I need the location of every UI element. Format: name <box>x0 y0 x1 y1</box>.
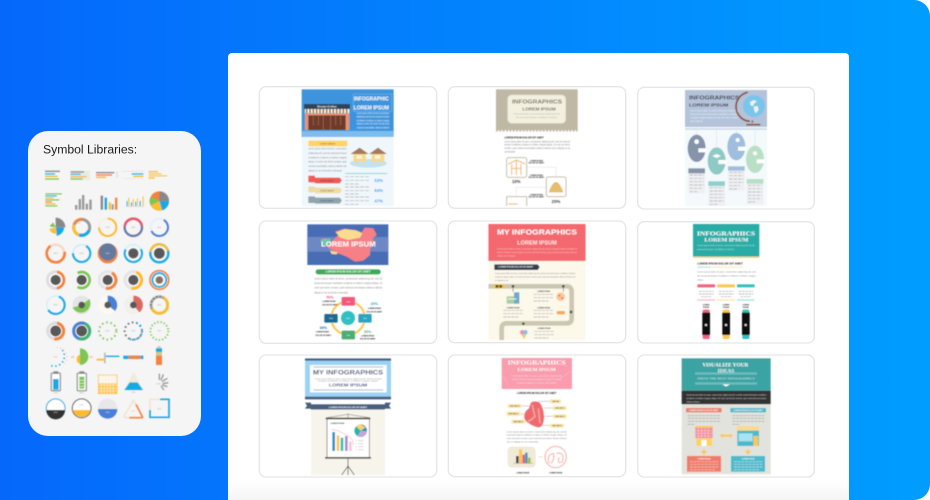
ribbon heading: LOREM IPSUM DOLOR SIT AMET <box>329 406 368 409</box>
template card 5: my infographics road <box>448 221 626 343</box>
road <box>488 284 572 342</box>
header: aliqua ut enim ad minim veniam quis <box>357 123 390 126</box>
header: LOREM IPSUM <box>517 240 557 246</box>
row 9: batteries, grid, pyramid, spinner: 70% <box>54 393 58 395</box>
row 10: fill gauges <box>46 399 169 419</box>
body text: enim ad minim veniam, quis nostrud exercitation ullamco laboris <box>314 287 383 290</box>
header <box>502 358 572 389</box>
cycle diagram: LOREM IPSUM <box>316 332 329 334</box>
body text: aliquip ex ea commodo consequat <box>314 291 348 294</box>
body text: LOREM IPSUM DOLOR SIT AMET <box>504 137 544 140</box>
heart diagram <box>506 399 567 428</box>
header with map: LOREM IPSUM <box>321 242 376 249</box>
right column <box>730 408 766 472</box>
cycle diagram: Text <box>347 334 351 337</box>
row 6: radial gauges <box>44 293 171 317</box>
body text: eiusmod tempor incididunt ut labore et dolore magna aliqua. Ut <box>507 434 567 437</box>
header: LOREM IPSUM <box>704 239 749 244</box>
green heading pill: LOREM IPSUM DOLOR SIT AMET <box>325 271 371 274</box>
ribbons: Lorem ipsum <box>320 189 334 192</box>
body text: tempor incididunt ut labore et dolore magna aliqua. Ut enim ad minim <box>504 144 570 147</box>
header: MY INFOGRAPHICS <box>313 369 384 376</box>
cycle diagram: DOLOR SIT AMET <box>360 338 376 341</box>
section heading: Lorem ipsum dolor sit amet, consectetur adipiscing elit, sed <box>697 271 756 274</box>
percentages <box>345 177 383 204</box>
text boxes <box>688 166 763 206</box>
template card 3: infographics globe <box>638 87 814 209</box>
header: eiusmod tempor incididunt ut labore <box>697 248 735 251</box>
cycle diagram: LOREM IPSUM <box>368 308 381 310</box>
row 6: radial gauges: 60% <box>157 305 162 307</box>
row 5: donuts <box>46 269 169 291</box>
flow diagram: DOLOR SIT AMET <box>529 176 545 179</box>
row 1: bar charts <box>45 171 167 180</box>
body text: enim ad minim veniam, quis nostrud exercitation ullamco laboris <box>507 437 567 440</box>
header: Lorem ipsum dolor sit amet, consectetur adipiscing elit, sed do eiusmod tempor incididunt ut <box>497 248 577 251</box>
row 8: dots, half circle, sliders, thermometer <box>51 346 162 366</box>
text blocks: LOREM IPSUM <box>538 328 551 330</box>
flow diagram: LOREM IPSUM <box>530 175 543 177</box>
header <box>488 224 586 261</box>
cycle diagram: DOLOR SIT AMET <box>316 334 332 337</box>
header: LOREM IPSUM <box>689 102 728 107</box>
body text <box>504 137 571 153</box>
fitness bands: IPSUM <box>743 307 749 309</box>
dark intro band: ut labore et dolore magna aliqua. Ut enim ad minim veniam, quis nostrud exercitation <box>686 397 766 400</box>
row 8: dots, half circle, sliders, thermometer: 60 <box>89 355 93 359</box>
cycle diagram: DOLOR SIT AMET <box>367 310 383 313</box>
header: INFOGRAPHICS <box>508 360 566 367</box>
template card 4: map lorem ipsum <box>259 221 437 343</box>
row 3: donuts: 75% <box>106 227 110 229</box>
row 9: batteries, grid, pyramid, spinner: 50% <box>157 383 161 385</box>
body text: aliqua. Ut enim ad minim veniam, quis <box>308 161 347 164</box>
body text: Lorem ipsum dolor sit amet, consectetur adipiscing elit, sed do <box>314 278 383 281</box>
huts illustration <box>350 148 387 168</box>
percentages: 47% <box>374 198 383 203</box>
cycle diagram: Text <box>347 300 351 303</box>
left column: LOREM IPSUM <box>698 458 711 460</box>
projector tripod <box>342 459 354 475</box>
body text: nisi ut aliquip ex ea commodo <box>507 440 539 443</box>
template card 2: infographics lorem ipsum beige <box>448 87 626 208</box>
right column: LOREM IPSUM <box>742 458 755 460</box>
section heading: aliqua. <box>697 280 704 282</box>
flow diagram <box>507 158 566 206</box>
header: do eiusmod tempor incididunt ut labore <box>516 116 558 119</box>
fitness bands: IPSUM <box>723 307 729 309</box>
header: LOREM IPSUM <box>522 106 556 111</box>
row 4: donuts: 60% <box>106 253 110 255</box>
header: labore et dolore magna aliqua. Ut enim ad minim veniam, quis nostrud exercitation ullamco <box>497 251 578 254</box>
body text: incididunt ut labore et dolore magna <box>308 156 347 159</box>
template card 9: visualize your ideas <box>638 355 814 477</box>
body text <box>495 272 576 282</box>
ribbons <box>308 176 342 204</box>
row 9: batteries, grid, pyramid, spinner: 80% <box>80 393 84 395</box>
ribbons: Lorem ipsum <box>320 179 334 182</box>
header: LOREM IPSUM <box>354 105 389 111</box>
cycle diagram: 30% <box>320 326 328 330</box>
row 4: donuts <box>45 241 170 265</box>
fitness bands: LOREM <box>742 305 749 307</box>
row 3: donuts: 44% <box>131 227 136 229</box>
row 2: bar charts and pie <box>45 191 169 211</box>
icons along road <box>507 292 565 339</box>
percentages: 53% <box>374 178 383 183</box>
header: laboris nisi ut aliquip <box>497 254 516 257</box>
hanging letter e shapes <box>688 133 765 175</box>
row 8: dots, half circle, sliders, thermometer: 26 <box>71 355 75 359</box>
three columns <box>697 284 755 301</box>
row 7: segmented gauges: 70% <box>157 331 162 333</box>
lungs circle: LOREM IPSUM <box>549 472 563 474</box>
header <box>685 90 767 130</box>
header: et dolore magna aliqua ut enim ad minim veniam <box>690 116 738 119</box>
body text <box>314 278 383 294</box>
flow diagram: DOLOR SIT AMET <box>529 195 545 198</box>
cycle diagram: DOLOR SIT AMET <box>322 303 339 306</box>
section heading: LOREM IPSUM DOLOR SIT AMET <box>517 392 557 395</box>
row 7: segmented gauges: 50% <box>131 331 136 333</box>
header <box>682 358 771 391</box>
body text: adipiscing elit, sed do eiusmod tempor <box>308 152 347 155</box>
arrows between buildings <box>720 433 733 438</box>
header: INFOGRAPHICS <box>512 100 562 106</box>
header: magna aliqua ut enim ad minim <box>517 382 557 385</box>
body text: nostrud exercitation ullamco laboris nisi <box>308 165 347 168</box>
header: VISUALIZE YOUR <box>702 363 749 368</box>
template card 7: my infographics projector <box>259 355 437 477</box>
panel: symbol libraries <box>28 131 201 436</box>
header: incididunt ut labore et dolore magna <box>357 119 390 122</box>
row 10: fill gauges: 44% <box>131 411 136 413</box>
template card 8: infographics heart <box>448 355 626 477</box>
header: quis nostrud <box>690 120 703 123</box>
cycle diagram: 20% <box>371 302 379 306</box>
row 7: segmented gauges <box>46 320 168 342</box>
symbol grid <box>44 171 171 419</box>
dark intro band: Lorem ipsum dolor sit amet, consectetur adipiscing elit, sed do eiusmod tempor incididunt <box>686 394 767 397</box>
header: Lorem ipsum dolor sit amet, consectetur adipiscing elit, sed do eiusmod <box>315 377 381 380</box>
cycle diagram: 50% <box>326 295 334 299</box>
header: Lorem ipsum dolor sit amet consectetur adipiscing <box>690 110 739 113</box>
row 10: fill gauges: 67% <box>157 409 162 411</box>
cycle diagram: Text <box>363 317 367 320</box>
header: IDEAS <box>718 369 735 374</box>
fitness bands: LOREM <box>723 305 730 307</box>
header: adipiscing elit sed do eiusmod tempor <box>357 116 390 119</box>
flow diagram: LOREM IPSUM <box>530 194 543 196</box>
fitness bands: LOREM <box>703 305 710 307</box>
body text: consequat <box>504 150 515 153</box>
header: Lorem ipsum dolor sit amet consectetur adipiscing elit sed <box>514 113 560 116</box>
header: INFOGRAPHICS <box>689 95 740 101</box>
dark intro band <box>682 391 771 404</box>
section heading: do eiusmod tempor incididunt ut labore et dolore magna <box>697 275 757 278</box>
projector screen chart: LOREM IPSUM <box>330 423 345 425</box>
right column: LOREM IPSUM DOLOR SIT AMET <box>733 409 763 412</box>
header: nostrud exercitation ullamco laboris <box>357 126 390 129</box>
row 9: batteries, grid, pyramid, spinner: 72% <box>131 392 136 394</box>
header: Lorem ipsum dolor sit amet consectetur <box>357 112 390 115</box>
dark heading: LOREM IPSUM DOLOR SIT AMET <box>498 266 534 269</box>
fitness bands <box>702 305 750 339</box>
row 10: fill gauges: 40% <box>80 405 84 407</box>
template card 6: infographics bands <box>638 222 814 343</box>
flow diagram: DOLOR SIT AMET <box>529 161 545 164</box>
text blocks: LOREM IPSUM <box>507 307 520 309</box>
cycle diagram: Text <box>346 317 350 320</box>
header: INFOGRAPHICS <box>697 231 755 238</box>
header: LOREM IPSUM <box>329 382 367 387</box>
header: sed do eiusmod tempor incididunt ut labore et dolore <box>512 378 563 381</box>
bar chart tile: LOREM IPSUM <box>516 472 530 474</box>
flow diagram: LOREM IPSUM <box>530 160 543 162</box>
body text <box>308 148 347 172</box>
text blocks: LOREM IPSUM <box>537 291 551 293</box>
row 10: fill gauges: 50% <box>54 412 58 414</box>
header <box>496 89 578 131</box>
row 3: donuts <box>49 215 171 239</box>
cycle diagram <box>316 295 383 341</box>
body text: Lorem ipsum dolor sit amet, consectetur adipiscing elit, sed do eiusmod <box>504 140 571 143</box>
header <box>693 224 759 258</box>
row 4: donuts: 68% <box>54 253 58 255</box>
header: elit sed do eiusmod tempor incididunt ut labore <box>690 113 739 116</box>
heading: symbol libraries: Symbol Libraries: <box>43 142 137 156</box>
header <box>302 89 394 137</box>
row 3: donuts: 51% <box>157 227 162 229</box>
header: LOREM IPSUM <box>517 367 556 372</box>
row 10: fill gauges: 50% <box>106 412 110 414</box>
header <box>305 358 391 399</box>
shop illustration: Dream Coffee <box>317 105 337 109</box>
header: INFOGRAPHIC <box>354 97 389 103</box>
yellow label: Lorem ipsum <box>320 142 336 146</box>
percentages: 64% <box>374 188 383 193</box>
header: PRESS THE BEST INFOGRAPHICS <box>697 377 755 381</box>
header: Lorem ipsum dolor sit amet, consectetur adipiscing elit <box>512 375 562 378</box>
row 8: dots, half circle, sliders, thermometer: 60% <box>54 357 58 359</box>
text blocks: LOREM IPSUM <box>537 307 551 309</box>
icon: globe <box>736 92 765 125</box>
row 9: batteries, grid, pyramid, spinner <box>51 371 168 395</box>
body text: veniam, quis nostrud exercitation ullamco laboris nisi ut aliquip ex ea <box>504 147 571 150</box>
body text: Lorem ipsum dolor sit amet, consectetur adipiscing elit, sed do <box>507 430 567 433</box>
header: tempor incididunt ut labore et dolore magna aliqua <box>318 380 379 383</box>
fitness bands: IPSUM <box>703 307 709 309</box>
cycle diagram: Text <box>329 317 333 320</box>
cycle diagram: LOREM IPSUM <box>323 301 336 303</box>
cycle diagram: LOREM IPSUM <box>361 335 375 337</box>
ribbons: Lorem ipsum <box>320 199 334 202</box>
text blocks <box>503 291 554 338</box>
template card 1: infographic lorem ipsum <box>259 87 437 208</box>
header: Lorem ipsum dolor sit amet, consectetur adipiscing elit sed do <box>697 244 756 247</box>
row 6: radial gauges: 60% <box>54 305 58 307</box>
left column: LOREM IPSUM DOLOR SIT AMET <box>689 409 719 412</box>
flow diagram: 20% <box>552 199 560 204</box>
section heading <box>697 263 757 282</box>
row 7: segmented gauges: 60% <box>106 331 110 333</box>
cycle diagram: 30% <box>364 330 372 334</box>
main white panel <box>228 53 849 500</box>
body text: ut aliquip ex ea <box>495 279 509 282</box>
row 4: donuts: 67% <box>80 253 84 255</box>
left column <box>686 408 722 472</box>
body text: Lorem ipsum dolor sit amet, consectetur <box>308 148 347 151</box>
section heading: LOREM IPSUM DOLOR SIT AMET <box>697 263 743 266</box>
header: MY INFOGRAPHICS <box>497 228 577 237</box>
body text: eiusmod tempor incididunt ut labore et dolore magna aliqua. Ut <box>314 282 383 285</box>
body text: et dolore magna aliqua. Ut enim ad minim veniam, quis nostrud exercitation ullamco laboris nisi <box>495 275 576 278</box>
body text <box>507 430 567 443</box>
body text: Lorem ipsum dolor sit amet, consectetur adipiscing elit, sed do eiusmod tempor incididunt ut labore <box>495 272 576 275</box>
flow diagram: 10% <box>512 179 521 184</box>
body text: aliquip ex ea commodo consequat <box>308 169 342 172</box>
dark intro band: ullamco laboris <box>686 400 700 403</box>
